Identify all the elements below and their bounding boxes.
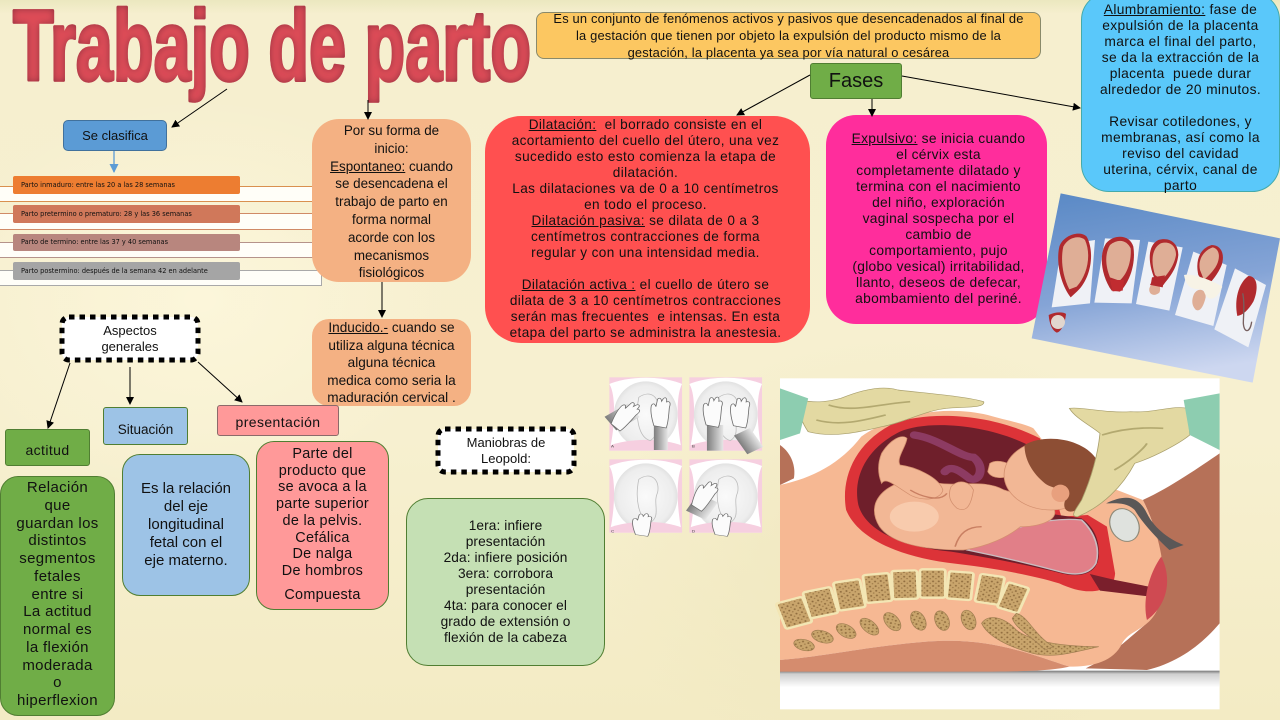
panel: forma de inicio: acorde con los — [348, 230, 435, 245]
panel: expulsivo: del niño, exploración — [872, 195, 1005, 210]
panel: presentacion description: Parte del — [292, 446, 353, 462]
spine vertebrae — [776, 569, 1029, 629]
panel: definicion — [536, 12, 1041, 59]
panel: situacion description: Es la relación — [141, 480, 231, 497]
baby — [874, 437, 1098, 550]
panel: expulsivo: el cérvix esta — [896, 147, 981, 162]
panel: actitud description: la flexión — [26, 639, 89, 656]
bar: parto inmaduro — [13, 176, 240, 194]
panel: leopold description — [406, 498, 605, 666]
panel: situacion description: eje materno. — [144, 552, 228, 569]
classification list — [0, 176, 322, 286]
panel: expulsivo: completamente dilatado y — [856, 163, 1021, 178]
panel: presentacion description: de la pelvis. — [283, 513, 362, 529]
panel: situacion description: fetal con el — [150, 534, 222, 551]
panel: expulsivo: termina con el nacimiento — [856, 179, 1021, 194]
bar: parto postermino — [13, 262, 240, 280]
bar: parto postermino: Parto postermino: después de la semana 42 en adelante — [21, 267, 208, 275]
panel: leopold description: presentación — [466, 534, 545, 549]
panel: dilatacion: etapa del parto se administra la anestesia. — [510, 325, 781, 340]
umbilical cord — [914, 435, 980, 479]
panel: expulsivo: cambio de — [905, 227, 972, 242]
label: presentacion: presentación — [236, 414, 320, 430]
panel: leopold description: grado de extensión o — [441, 614, 570, 629]
arrow: fases to expulsivo — [871, 99, 873, 116]
bar: parto de termino: Parto de termino: entre las 37 y 40 semanas — [21, 238, 168, 246]
panel: expulsivo: comportamiento, pujo — [869, 243, 1008, 258]
arrow: espontaneo to inducido — [381, 282, 383, 317]
panel: forma de inicio: trabajo de parto en — [335, 194, 448, 209]
image: leopold maneuvers: B — [692, 444, 695, 448]
label: aspectos generales: generales — [101, 339, 159, 354]
label: presentacion — [217, 405, 339, 436]
panel: situacion description: longitudinal — [148, 516, 224, 533]
arrow: aspectos to presentacion — [198, 362, 242, 402]
panel: dilatacion: en todo el proceso. — [584, 197, 707, 212]
image: fetus in uterus with examiner hands — [776, 378, 1220, 709]
arrow: se clasifica to list — [113, 151, 115, 172]
uterus wall — [845, 416, 1115, 591]
panel: expulsivo: abombamiento del periné. — [855, 291, 1022, 306]
panel: actitud description: entre si — [32, 586, 84, 602]
panel: dilatacion — [485, 116, 810, 343]
label: situacion: Situación — [118, 422, 173, 437]
panel: dilatacion: Dilatación pasiva: se dilata de 0 a 3 — [532, 213, 759, 228]
panel: actitud description: hiperflexion — [17, 692, 98, 709]
panel: inducido: alguna técnica — [348, 355, 435, 370]
panel: presentacion description: producto que — [279, 463, 366, 479]
panel: inducido: Inducido.- cuando se — [328, 320, 455, 335]
panel: expulsivo: vaginal sospecha por el — [863, 211, 1014, 226]
panel: forma de inicio: fisiológicos — [359, 265, 424, 280]
panel: actitud description: moderada — [22, 656, 93, 674]
panel: alumbramiento: expulsión de la placenta — [1102, 18, 1259, 33]
label: actitud — [5, 429, 90, 466]
arrow: aspectos to situacion — [129, 367, 131, 404]
image: delivery stage models — [1032, 193, 1280, 382]
image: leopold maneuvers: C — [611, 529, 614, 534]
bar: parto de termino — [13, 234, 240, 251]
bar: parto pretermino — [13, 205, 240, 223]
panel: expulsivo: (globo vesical) irritabilidad, — [852, 259, 1025, 274]
panel: actitud description: distintos — [28, 532, 87, 549]
arrow: title to forma de inicio — [367, 100, 369, 119]
panel: inducido: maduración cervical . — [327, 390, 456, 405]
label: aspectos generales — [60, 314, 200, 362]
panel: dilatacion: dilata de 3 a 10 centímetros contracciones — [510, 293, 781, 308]
dark thigh — [1086, 453, 1220, 670]
panel: actitud description: normal es — [23, 621, 92, 638]
panel: dilatacion: centímetros contracciones de forma — [531, 229, 760, 244]
gloves — [799, 388, 984, 434]
panel: dilatacion: acortamiento del cuello del útero, una vez — [512, 133, 779, 148]
panel: leopold description: 4ta: para conocer el — [444, 598, 567, 613]
panel: expulsivo: Expulsivo: se inicia cuando — [852, 131, 1025, 146]
panel: alumbramiento — [1081, 0, 1280, 192]
panel: actitud description — [0, 476, 115, 716]
panel: alumbramiento: alrededor de 20 minutos. — [1100, 82, 1261, 97]
bar: parto inmaduro: Parto inmaduro: entre las 20 a las 28 semanas — [21, 181, 175, 189]
panel: presentacion description: parte superior — [276, 496, 369, 512]
panel: presentacion description: se avoca a la — [278, 479, 367, 495]
panel: dilatacion: Dilatación activa : el cuello de útero se — [522, 277, 769, 292]
label: situacion — [103, 407, 188, 445]
arrow: fases to alumbramiento — [902, 76, 1080, 108]
panel: leopold description: 2da: infiere posición — [444, 550, 567, 565]
label: maniobras de leopold: Maniobras de — [467, 435, 545, 450]
arrow: aspectos to actitud — [48, 363, 70, 428]
panel: expulsivo: llanto, deseos de defecar, — [856, 275, 1021, 290]
panel: forma de inicio: forma normal — [352, 212, 431, 227]
cervix and bladder — [1090, 574, 1151, 597]
panel: forma de inicio: Por su forma de — [344, 123, 439, 138]
panel: dilatacion: Las dilataciones va de 0 a 10 centímetros — [512, 181, 779, 196]
panel: alumbramiento: uterina, cérvix, canal de — [1103, 162, 1258, 177]
panel: actitud description: La actitud — [23, 603, 92, 620]
panel: actitud description: guardan los — [16, 514, 99, 532]
panel: inducido — [312, 319, 471, 406]
panel: alumbramiento: se da la extracción de la — [1102, 50, 1259, 65]
panel: forma de inicio: Espontaneo: cuando — [330, 159, 453, 174]
panel: actitud description: o — [53, 674, 62, 691]
panel: dilatacion: Dilatación: el borrado consiste en el — [529, 117, 762, 132]
panel: actitud description: que — [44, 497, 71, 514]
panel: alumbramiento: reviso del cavidad — [1122, 146, 1239, 161]
arrow: title to se clasifica — [172, 89, 227, 127]
image: leopold maneuvers — [604, 377, 1220, 710]
panel: presentacion description — [256, 441, 389, 610]
panel: situacion description — [122, 454, 250, 596]
panel: definicion: la gestación que tienen por objeto la expulsión del producto mismo de la — [576, 28, 1001, 43]
panel: presentacion description: De nalga — [292, 546, 352, 562]
panel: inducido: medica como seria la — [327, 373, 456, 388]
panel: alumbramiento: membranas, así como la — [1101, 130, 1260, 145]
panel: inducido: utiliza alguna técnica — [328, 338, 455, 353]
panel: dilatacion: dilatación. — [613, 165, 678, 180]
panel: leopold description: 1era: infiere — [469, 518, 542, 533]
label: aspectos generales: Aspectos — [103, 323, 157, 338]
panel: alumbramiento: Revisar cotiledones, y — [1109, 114, 1252, 129]
arrow: fases to dilatacion — [737, 75, 810, 115]
bar: parto pretermino: Parto pretermino o prematuro: 28 y las 36 semanas — [21, 210, 192, 218]
panel: actitud description: Relación — [27, 479, 88, 496]
maternal body — [780, 411, 1163, 667]
panel: alumbramiento: parto — [1164, 178, 1197, 193]
heading: fases — [810, 63, 902, 99]
panel: definicion: gestación, la placenta ya sea por vía natural o cesárea — [628, 45, 949, 60]
panel: dilatacion: sucedido esto esto comienza la etapa de — [515, 149, 776, 164]
button: se clasifica: Se clasifica — [82, 128, 148, 143]
heading: fases: Fases — [829, 70, 883, 92]
panel: definicion: Es un conjunto de fenómenos activos y pasivos que desencadenados al final de — [553, 11, 1024, 26]
label: actitud: actitud — [25, 442, 70, 458]
panel: leopold description: flexión de la cabeza — [444, 630, 567, 645]
panel: forma de inicio: mecanismos — [354, 248, 429, 263]
panel: alumbramiento: marca el final del parto, — [1104, 34, 1257, 49]
panel: dilatacion: serán mas frecuentes e intensas. En esta — [511, 309, 780, 324]
panel: alumbramiento: Alumbramiento: fase de — [1104, 2, 1257, 17]
image: leopold maneuvers: A — [611, 444, 614, 448]
panel: expulsivo — [826, 115, 1047, 324]
panel: leopold description: presentación — [466, 582, 545, 597]
panel: presentacion description: Cefálica — [295, 530, 350, 546]
panel: alumbramiento: placenta puede durar — [1110, 66, 1251, 81]
panel: forma de inicio — [312, 119, 471, 282]
panel: forma de inicio: se desencadena el — [335, 176, 448, 191]
panel: situacion description: del eje — [164, 498, 208, 515]
image: leopold maneuvers: D — [692, 529, 695, 534]
panel: dilatacion: regular y con una intensidad media. — [531, 245, 760, 260]
panel: leopold description: 3era: corrobora — [458, 566, 553, 581]
panel: presentacion description: De hombros — [282, 563, 363, 579]
panel: forma de inicio: inicio: — [374, 141, 409, 156]
panel: actitud description: fetales — [34, 568, 81, 585]
uterus cavity — [857, 425, 1099, 575]
panel: presentacion description: Compuesta — [284, 587, 361, 603]
button: se clasifica — [63, 120, 167, 151]
panel: actitud description: segmentos — [19, 550, 96, 567]
label: maniobras de leopold: Leopold: — [481, 451, 531, 466]
label: maniobras de leopold — [436, 426, 576, 474]
